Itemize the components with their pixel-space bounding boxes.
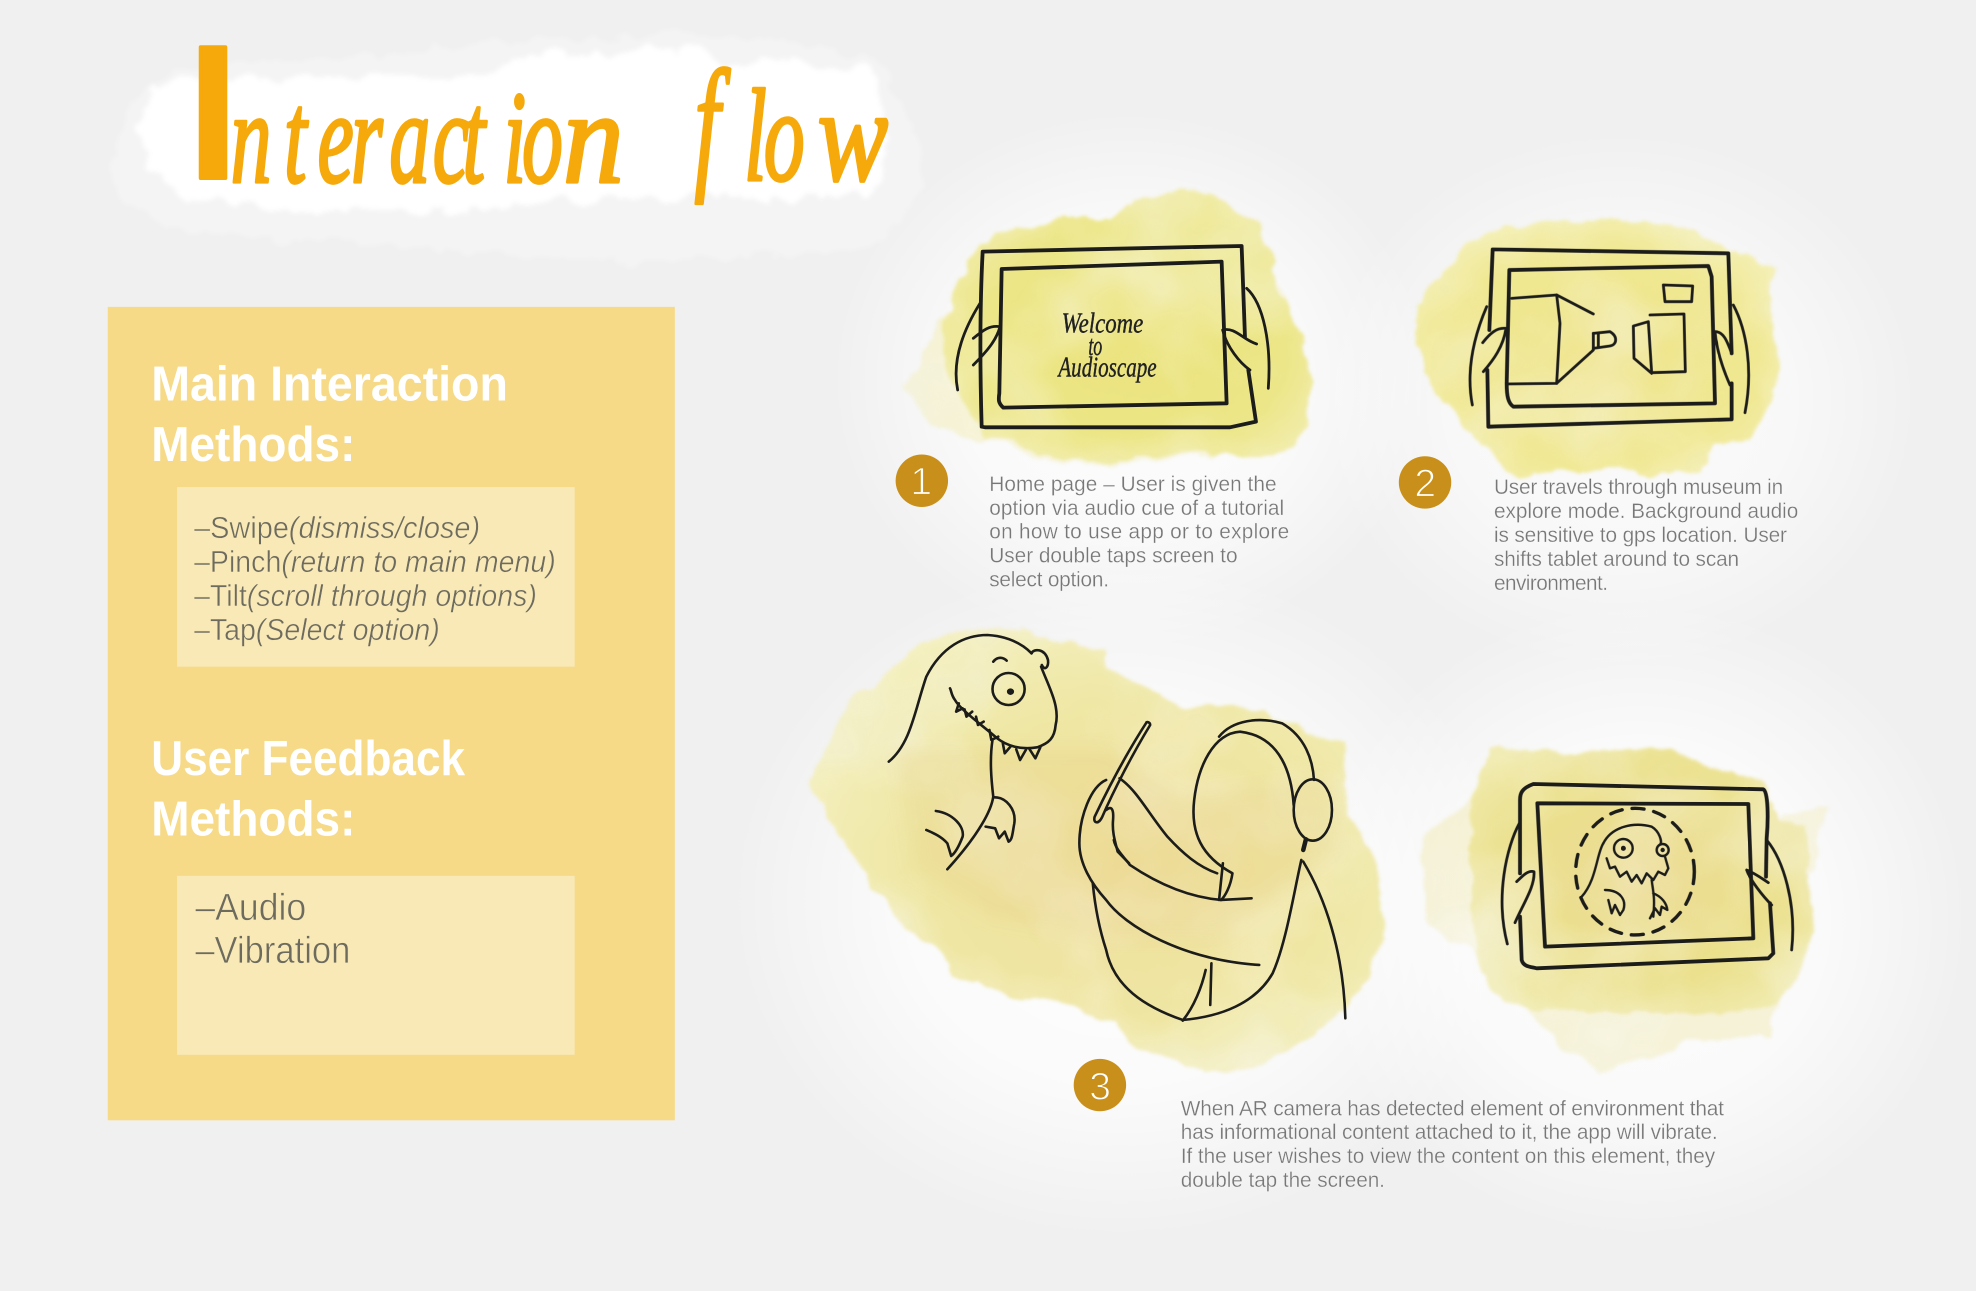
step 2 number badge: 2	[1414, 463, 1436, 506]
handwritten welcome message: to	[1088, 331, 1102, 362]
title: e	[317, 64, 354, 211]
title: c	[433, 64, 469, 211]
title: r	[351, 64, 384, 211]
heading: user feedback methods: User Feedback	[151, 732, 466, 786]
step 1 number badge	[896, 455, 948, 507]
step 1 description	[989, 473, 1289, 592]
step 2 description: is sensitive to gps location. User	[1494, 524, 1787, 547]
box: interaction list: –Pinch(return to main menu)	[194, 546, 556, 579]
hands	[1502, 823, 1793, 950]
box: feedback list	[177, 876, 575, 1055]
box: interaction list: –Tap(Select option)	[194, 614, 440, 647]
title brush stroke	[108, 33, 923, 263]
step 2 description: explore mode. Background audio	[1494, 500, 1798, 523]
heading: user feedback methods: Methods:	[151, 793, 355, 847]
dashed detection circle	[1576, 808, 1694, 935]
step 1	[896, 455, 1289, 592]
watercolor washes	[811, 187, 1830, 1073]
sketch: tablet showing detected dinosaur	[1502, 784, 1793, 968]
step 2 description: shifts tablet around to scan	[1494, 548, 1739, 571]
step 3 description: has informational content attached to it, the app will vibrate.	[1181, 1121, 1718, 1144]
step 3 description	[1181, 1097, 1724, 1192]
tablet frame	[981, 246, 1256, 427]
title: l	[744, 62, 767, 209]
title: o	[522, 64, 563, 211]
step 1 number badge: 1	[910, 461, 932, 504]
step 1 description: option via audio cue of a tutorial	[989, 497, 1284, 520]
step 3 description: If the user wishes to view the content on this element, they	[1181, 1145, 1716, 1168]
sketch: tablet with museum view	[1470, 249, 1749, 427]
heading: main interaction methods: Main Interaction	[151, 358, 508, 412]
soft white glows behind sketches	[730, 110, 1970, 1240]
person with headphones	[1079, 720, 1345, 1021]
title: f	[694, 40, 731, 204]
warm tan tint in scene wash	[896, 750, 1336, 937]
title: I	[189, 8, 237, 219]
heading: main interaction methods: Methods:	[151, 418, 355, 472]
box: feedback list: –Audio	[195, 887, 306, 929]
hands	[956, 288, 1269, 390]
hands	[1470, 305, 1749, 413]
step 3	[1074, 1059, 1724, 1192]
title: t	[463, 64, 487, 211]
box: interaction list: –Swipe(dismiss/close)	[194, 512, 480, 545]
title	[189, 8, 888, 219]
step 3 description: When AR camera has detected element of environment that	[1181, 1097, 1724, 1120]
title: w	[818, 62, 888, 209]
step 3 description: double tap the screen.	[1181, 1169, 1385, 1192]
title: n	[563, 65, 624, 211]
step 1 description: select option.	[989, 569, 1109, 592]
step 1 description: Home page – User is given the	[989, 473, 1277, 496]
step 2 number badge	[1399, 456, 1451, 509]
title: n	[231, 64, 272, 211]
step 2 description: environment.	[1494, 572, 1608, 595]
heading: user feedback methods	[151, 732, 466, 847]
step 1 description: on how to use app or to explore	[989, 521, 1289, 544]
step 3 number badge	[1074, 1059, 1126, 1111]
title: a	[389, 64, 430, 211]
panel: interaction and feedback methods	[108, 307, 675, 1120]
handwritten welcome message: Audioscape	[1057, 353, 1157, 384]
handwritten welcome message: Welcome	[1062, 308, 1143, 339]
box: feedback list: –Vibration	[195, 930, 350, 972]
step 3 number badge: 3	[1089, 1066, 1111, 1109]
box: interaction list: –Tilt(scroll through options)	[194, 580, 537, 613]
sketch: person viewing dinosaur with AR tablet	[889, 635, 1345, 1021]
heading: main interaction methods	[151, 358, 508, 472]
tablet frame	[1520, 784, 1773, 968]
mini dinosaur	[1582, 825, 1669, 918]
step 2 description: User travels through museum in	[1494, 476, 1783, 499]
step 2 description	[1494, 476, 1798, 595]
sketch: tablet with welcome screen	[956, 246, 1269, 427]
museum objects on screen	[1507, 285, 1693, 384]
step 2	[1399, 456, 1798, 595]
title: i	[503, 64, 526, 211]
tablet frame	[1487, 249, 1732, 427]
handwritten welcome message	[1057, 308, 1157, 384]
dinosaur	[889, 635, 1057, 869]
box: interaction list	[177, 487, 575, 667]
title: o	[764, 62, 805, 209]
step 1 description: User double taps screen to	[989, 545, 1238, 568]
title: t	[284, 64, 309, 211]
